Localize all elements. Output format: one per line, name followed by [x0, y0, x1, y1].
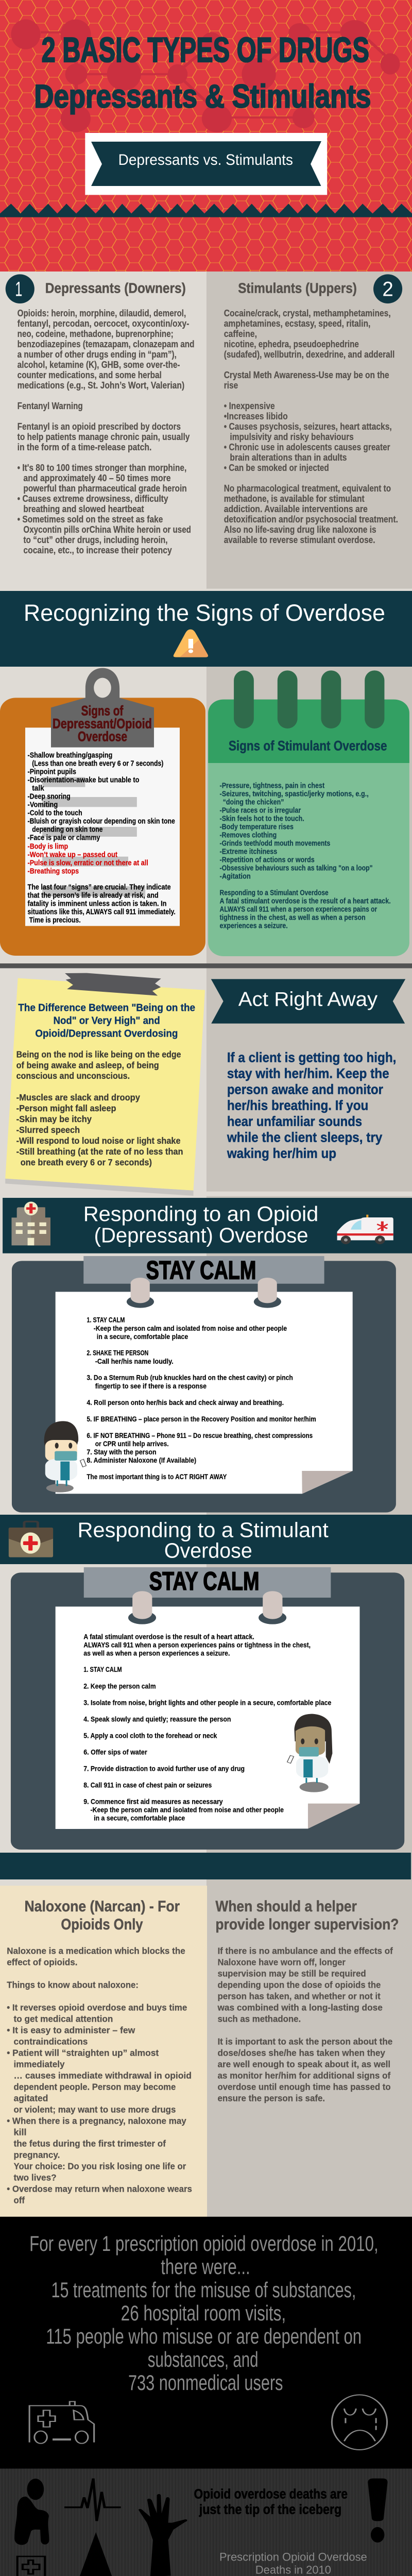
clipboard header: STAY CALM — [146, 1256, 256, 1284]
opioid response steps: 7. Stay with the person — [87, 1448, 157, 1456]
naloxone body text: … causes immediate withdrawal in opioid — [14, 2070, 192, 2081]
note body: -Muscles are slack and droopy — [16, 1092, 140, 1103]
icon: ambulance outline — [29, 2401, 94, 2444]
naloxone body text: pregnancy. — [14, 2149, 60, 2160]
panel: depressants — [6, 274, 195, 556]
note body: of being awake and asleep, of being — [16, 1060, 159, 1070]
stimulants body text: •Increases libido — [224, 411, 288, 422]
list: signs of stimulant overdose: -Skin feels hot to the touch. — [220, 814, 304, 823]
depressants body text: benzodiazepines (temazapam, clonazepam and — [18, 339, 195, 350]
icon: doctor with long hair — [287, 1714, 332, 1792]
clipboard header: STAY CALM — [149, 1566, 260, 1596]
zigzag divider — [0, 204, 412, 217]
depressants body text: • Sometimes sold on the street as fake — [18, 514, 163, 525]
panel: sticky note, being on the nod vs overdosing — [5, 973, 205, 1196]
depressants body text: fentanyl, percodan, oercocet, oxycontin/oxy- — [18, 318, 189, 329]
note body: -Person might fall asleep — [16, 1103, 116, 1113]
depressants body text: medications (e.g., St. John’s Wort, Valerian) — [18, 380, 184, 391]
depressants body text: Oxycontin pills orChina White heroin or used — [23, 524, 191, 535]
note body: -Will respond to loud noise or light shake — [16, 1136, 181, 1146]
list: signs of depressant overdose: -Breathing stops — [28, 867, 79, 875]
list: signs of depressant overdose: situations like this, ALWAYS call 911 immediately. — [28, 907, 176, 916]
opioid response steps: fingertip to see if there is a response — [95, 1382, 207, 1390]
list: signs of depressant overdose: -Pinpoint pupils — [28, 767, 76, 776]
banner title — [78, 1518, 329, 1563]
panel: opioid overdose response clipboard — [12, 1256, 396, 1513]
statistics text: there were... — [161, 2255, 250, 2279]
supervision body text — [217, 1945, 393, 2104]
title — [34, 31, 371, 114]
banner title — [83, 1202, 318, 1247]
depressants body text: Fentanyl is an opioid prescribed by doctors — [18, 421, 181, 432]
naloxone body text: • When there is a pregnancy, naloxone may — [7, 2115, 186, 2126]
list: signs of depressant overdose: -Bluish or grayish colour depending on skin tone — [28, 817, 175, 825]
panel: act right away — [211, 979, 405, 1161]
naloxone body text: • Patient will “straighten up” almost — [7, 2047, 159, 2058]
list: signs of depressant overdose: -Deep snoring — [28, 792, 71, 801]
statistics text — [29, 2232, 379, 2395]
list: signs of depressant overdose: that the person’s life is already at risk, and — [28, 891, 159, 900]
note body: Being on the nod is like being on the edge — [16, 1049, 181, 1059]
stimulant response steps: 5. Apply a cool cloth to the forehead or neck — [83, 1732, 217, 1739]
naloxone body text: Naloxone is a medication which blocks the — [7, 1945, 185, 1956]
opioid response steps — [87, 1316, 316, 1481]
stimulants body text — [224, 308, 398, 546]
note heading: The Difference Between "Being on the — [18, 1003, 195, 1013]
iceberg shape — [24, 2532, 188, 2576]
depressants body text: a number of other drugs ending in “pam”), — [18, 349, 177, 360]
paper sheet — [25, 727, 180, 926]
stimulant response steps: 6. Offer sips of water — [83, 1748, 147, 1756]
panel: opioid deaths iceberg and chart — [0, 2469, 412, 2576]
list: signs of depressant overdose: -Vomiting — [28, 800, 58, 809]
note body: one breath every 6 or 7 seconds) — [21, 1157, 152, 1167]
chart title — [219, 2551, 367, 2576]
depressants body text: counter medications, and some herbal — [18, 370, 162, 381]
header: red hexagon background — [0, 0, 412, 272]
list: signs of depressant overdose: -Face is pale or clammy — [28, 833, 100, 842]
naloxone body text: • Overdose may return when naloxone wears — [7, 2183, 192, 2194]
depressants body text: and approximately 40 – 50 times more — [23, 473, 171, 484]
dark divider bar — [0, 1853, 411, 1879]
paper sheet — [56, 1606, 360, 1829]
clipboard header — [83, 1256, 324, 1284]
opioid response steps: -Call her/his name loudly. — [95, 1358, 174, 1365]
stimulant response steps: 2. Keep the person calm — [83, 1682, 156, 1690]
list: signs of stimulant overdose: “doing the chicken” — [223, 798, 284, 806]
depressants body text: • It's 80 to 100 times stronger than morphine, — [18, 463, 186, 473]
ribbon: act right away — [211, 979, 405, 1024]
list: signs of stimulant overdose: -Extreme itchiness — [220, 847, 277, 856]
page background panels — [0, 272, 412, 2229]
clip with title — [51, 668, 154, 748]
heading: naloxone: Naloxone (Narcan) - For — [24, 1898, 180, 1915]
list: signs of depressant overdose — [28, 751, 176, 924]
naloxone body text: kill — [14, 2127, 27, 2138]
panel: statistics on black background — [0, 2217, 412, 2469]
clip with title: Overdose — [78, 729, 127, 744]
naloxone body text — [7, 1945, 192, 2206]
naloxone body text: Your choice: Do you risk losing one life or — [14, 2161, 186, 2172]
notepad body — [208, 700, 409, 763]
stimulant response steps: 9. Commence first aid measures as necessary — [83, 1798, 223, 1805]
banner: recognizing the signs of overdose — [0, 591, 412, 667]
note body: conscious and unconscious. — [16, 1071, 130, 1081]
icon: number 1: 1 — [15, 277, 22, 300]
list: signs of depressant overdose: (Less than one breath every 6 or 7 seconds) — [32, 759, 163, 768]
heading: naloxone — [24, 1898, 180, 1933]
depressants body text: Opioids: heroin, morphine, dilaudid, demerol, — [18, 308, 186, 319]
list: signs of depressant overdose: The last four “signs” are crucial. They indicate — [28, 883, 171, 891]
note body: -Still breathing (at the rate of no less than — [16, 1146, 183, 1157]
stimulants body text: caffeine, — [224, 329, 257, 340]
icon: warning triangle — [174, 630, 208, 657]
list: signs of stimulant overdose: -Removes clothing — [220, 831, 277, 839]
binder rings — [127, 1278, 281, 1308]
depressants body text: • Causes extreme drowsiness, difficulty — [18, 494, 168, 504]
panel: stimulants — [224, 274, 402, 546]
panel: naloxone — [0, 1886, 207, 2217]
opioid response steps: 8. Administer Naloxone (If Available) — [87, 1456, 196, 1464]
icon: ambulance — [337, 1215, 393, 1244]
icon: exclamation mark — [368, 2479, 388, 2543]
naloxone body text: effect of opioids. — [7, 1957, 78, 1968]
naloxone body text: to get medical attention — [14, 2013, 113, 2024]
list: signs of depressant overdose: -Shallow breathing/gasping — [28, 751, 112, 760]
banner title: Overdose — [164, 1539, 252, 1563]
icon: hospital outline — [18, 2556, 45, 2576]
naloxone body text: or violent; may want to use more drugs — [14, 2104, 176, 2115]
list: signs of stimulant overdose: -Agitation — [220, 872, 251, 880]
stimulant response steps — [83, 1633, 331, 1822]
heading: depressants: Depressants (Downers) — [45, 280, 186, 296]
stimulant response steps: 7. Provide distraction to avoid further use of any drug — [83, 1765, 245, 1772]
depressants body text: to help patients manage chronic pain, usually — [18, 432, 190, 443]
naloxone body text: • It is easy to administer – few — [7, 2025, 135, 2036]
naloxone body text: two lives? — [14, 2172, 57, 2183]
bar chart — [201, 2551, 385, 2576]
naloxone body text: off — [14, 2195, 25, 2206]
icon: number 2 — [373, 274, 402, 303]
list: signs of depressant overdose: Time is precious. — [29, 916, 81, 924]
ribbon: Depressants vs. Stimulants: Depressants vs. Stimulants — [118, 151, 293, 168]
depressants body text — [18, 308, 195, 556]
icon: first aid kit — [9, 1521, 53, 1557]
depressants body text: in the form of a time-release patch. — [18, 442, 151, 453]
opioid response steps: The most important thing is to ACT RIGHT AWAY — [87, 1473, 227, 1481]
banner: responding to an opioid overdose — [3, 1198, 412, 1253]
act right away text: waking her/him up — [227, 1146, 336, 1161]
list: signs of depressant overdose: -Won’t wake up – passed out — [28, 850, 117, 859]
note heading — [18, 1003, 195, 1039]
depressants body text: alcohol, ketamine (K), GHB, some over-the- — [18, 360, 180, 370]
list: signs of stimulant overdose: -Repetition of actions or words — [220, 855, 315, 864]
heading: naloxone: Opioids Only — [61, 1916, 143, 1933]
tape — [65, 973, 161, 996]
depressants body text: to “cut” other drugs, including heroin, — [23, 535, 168, 546]
divider strip — [0, 963, 412, 968]
clip with title: Depressant/Opioid — [53, 716, 152, 732]
opioid response steps: 2. SHAKE THE PERSON — [87, 1349, 148, 1357]
depressants body text: neo, codeine, methadone, buprenorphine; — [18, 329, 174, 340]
list: signs of depressant overdose: depending on skin tone — [32, 825, 103, 834]
paper sheet — [56, 1292, 353, 1494]
naloxone body text: the fetus during the first trimester of — [14, 2138, 166, 2149]
banner: responding to a stimulant overdose — [0, 1515, 412, 1564]
heading: tip of the iceberg — [194, 2487, 348, 2517]
opioid response steps: 1. STAY CALM — [87, 1316, 125, 1324]
decorative molecule — [11, 20, 400, 132]
clipboard header — [84, 1566, 331, 1598]
list: signs of depressant overdose: -Disorientation-awake but unable to — [28, 775, 140, 784]
list: signs of depressant overdose: -Cold to the touch — [28, 808, 82, 817]
note body — [16, 1049, 183, 1167]
note body: -Slurred speech — [16, 1125, 80, 1135]
stimulant response steps: 1. STAY CALM — [83, 1666, 122, 1673]
binder rings — [128, 1591, 286, 1624]
act right away text — [227, 1050, 396, 1161]
note heading: Nod" or Very High" and — [54, 1015, 160, 1026]
panel: signs of depressant/opioid overdose clipboard — [0, 668, 205, 956]
opioid response steps: or CPR until help arrives. — [95, 1440, 169, 1448]
naloxone body text: immediately — [14, 2059, 65, 2070]
list: signs of stimulant overdose: -Pressure, tightness, pain in chest — [220, 781, 324, 790]
statistics text: substances, and — [148, 2348, 259, 2371]
icon: number 2: 2 — [382, 277, 393, 300]
naloxone body text: agitated — [14, 2093, 48, 2104]
list: signs of stimulant overdose: -Pulse races or is irregular — [220, 806, 301, 815]
icon: sad face — [332, 2395, 387, 2450]
stimulants body text: • Inexpensive — [224, 401, 275, 412]
clip with title: Signs of — [81, 703, 124, 719]
opioid response steps: in a secure, comfortable place — [97, 1333, 188, 1341]
depressants body text: powerful than pharmaceutical grade heroin — [23, 483, 187, 494]
heading: longer supervision — [215, 1898, 399, 1933]
ribbon: Depressants vs. Stimulants — [85, 133, 327, 195]
list: signs of depressant overdose: -Body is limp — [28, 842, 68, 851]
naloxone body text: Things to know about naloxone: — [7, 1979, 139, 1990]
panel: longer supervision — [215, 1898, 399, 2104]
panel: stimulant overdose response clipboard — [11, 1566, 404, 1850]
naloxone body text: dependent people. Person may become — [14, 2081, 176, 2092]
icon: doctor — [44, 1421, 86, 1493]
notepad rings — [234, 670, 384, 728]
supervision body text: such as methadone. — [217, 2013, 301, 2024]
supervision body text: ensure the person is safe. — [217, 2093, 325, 2104]
list: signs of stimulant overdose: experiences a seizure. — [220, 921, 288, 930]
stimulants body text: rise — [224, 380, 238, 391]
list: signs of depressant overdose: talk — [32, 784, 44, 792]
stimulant response steps: A fatal stimulant overdose is the result of a heart attack. — [83, 1633, 254, 1640]
icon: number 1 — [6, 274, 35, 303]
icon: heartbeat line — [64, 2479, 121, 2521]
note heading: Opioid/Depressant Overdosing — [35, 1028, 178, 1039]
icon: raised hand — [139, 2494, 187, 2576]
naloxone body text: contraindications — [14, 2036, 88, 2047]
list: signs of stimulant overdose: -Body temperature rises — [220, 822, 294, 831]
depressants body text: Fentanyl Warning — [18, 401, 83, 412]
stimulant response steps: in a secure, comfortable place — [94, 1814, 185, 1822]
icon: sitting person — [14, 2479, 49, 2545]
naloxone body text: • It reverses opioid overdose and buys time — [7, 2002, 187, 2013]
depressants body text: breathing and slowed heartbeat — [23, 504, 144, 515]
depressants body text: cocaine, etc., to increase their potency — [23, 545, 172, 556]
note body: -Skin may be itchy — [16, 1114, 92, 1124]
stimulant response steps: 4. Speak slowly and quietly; reassure the person — [83, 1715, 231, 1723]
stimulant response steps: 8. Call 911 in case of chest pain or seizures — [83, 1781, 212, 1789]
stimulant response steps: as well as when a person experiences a seizure. — [83, 1649, 230, 1657]
list: signs of depressant overdose: fatality is imminent unless action is taken. In — [28, 899, 166, 908]
list: signs of depressant overdose: -Pulse is slow, erratic or not there at all — [28, 858, 148, 867]
panel: signs of stimulant overdose notepad — [208, 670, 409, 956]
icon: hospital — [11, 1201, 50, 1245]
list: signs of stimulant overdose — [220, 781, 391, 930]
grey patches on paper — [42, 777, 145, 896]
